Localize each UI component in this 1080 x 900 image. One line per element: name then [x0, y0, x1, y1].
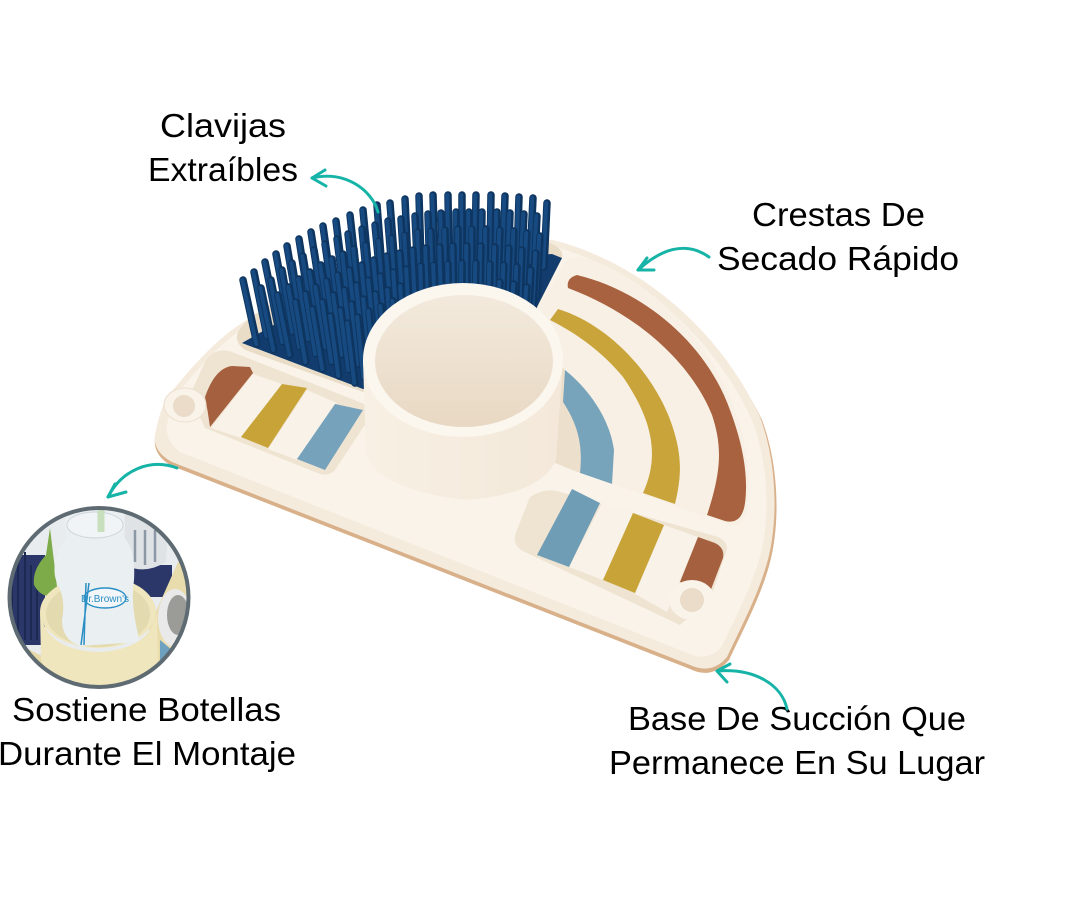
label: holds bottles during assembly: [0, 691, 296, 772]
tray top lip: [167, 243, 767, 657]
arrow: to bottle photo: [108, 465, 177, 497]
green brush: [34, 528, 58, 596]
bottle brand: Dr.Brown's: [81, 594, 129, 605]
bottom-right compartment: [515, 489, 727, 625]
label: quick-dry ridges: [717, 196, 959, 277]
navy pegs: [13, 555, 45, 645]
bottle: [54, 538, 139, 646]
label: suction base: Permanece En Su Lugar: [609, 744, 985, 781]
rainbow compartment: [530, 257, 748, 526]
cup front: [40, 612, 158, 691]
brown rainbow ridge: [568, 275, 746, 522]
label: holds bottles during assembly: Durante El Montaje: [0, 735, 296, 772]
left blue stripe: [297, 404, 363, 470]
arrow: to base: [717, 664, 787, 709]
peg base: [242, 254, 562, 389]
label: quick-dry ridges: Secado Rápido: [717, 240, 959, 277]
divider strip: [550, 463, 734, 540]
bottle cap: [158, 589, 186, 646]
label: removable pegs: Clavijas: [160, 107, 286, 144]
label: removable pegs: [148, 107, 298, 188]
label: suction base: Base De Succión Que: [628, 700, 966, 737]
yellow rainbow ridge: [550, 309, 680, 504]
blue rainbow ridge: [563, 370, 614, 484]
peg compartment floor: [237, 239, 562, 392]
label: holds bottles during assembly: Sostiene Botellas: [12, 691, 281, 728]
left suction hole: [164, 388, 206, 422]
tray base shadow: [155, 239, 777, 673]
photo circle: bottle held in cup: [8, 507, 192, 691]
tray corner: [149, 562, 186, 662]
right suction hole: [669, 580, 715, 620]
arrow: to ridges: [638, 248, 709, 270]
left compartment: [190, 350, 369, 475]
left yellow stripe: [241, 384, 307, 448]
label: quick-dry ridges: Crestas De: [752, 196, 925, 233]
arrow: to pegs: [312, 170, 378, 212]
label: removable pegs: Extraíbles: [148, 151, 298, 188]
tray body: [155, 237, 775, 669]
product: drying rack tray: [155, 195, 777, 673]
removable pegs: [242, 195, 547, 383]
right yellow stripe: [603, 513, 664, 593]
right brown stripe: [680, 537, 723, 592]
bottle brand: [81, 583, 129, 645]
left brown stripe: [205, 366, 253, 427]
clear brush: [125, 513, 168, 569]
right blue stripe: [537, 489, 600, 567]
label: suction base: [609, 700, 985, 781]
cup rim: [40, 584, 156, 648]
central cup: [363, 283, 563, 500]
